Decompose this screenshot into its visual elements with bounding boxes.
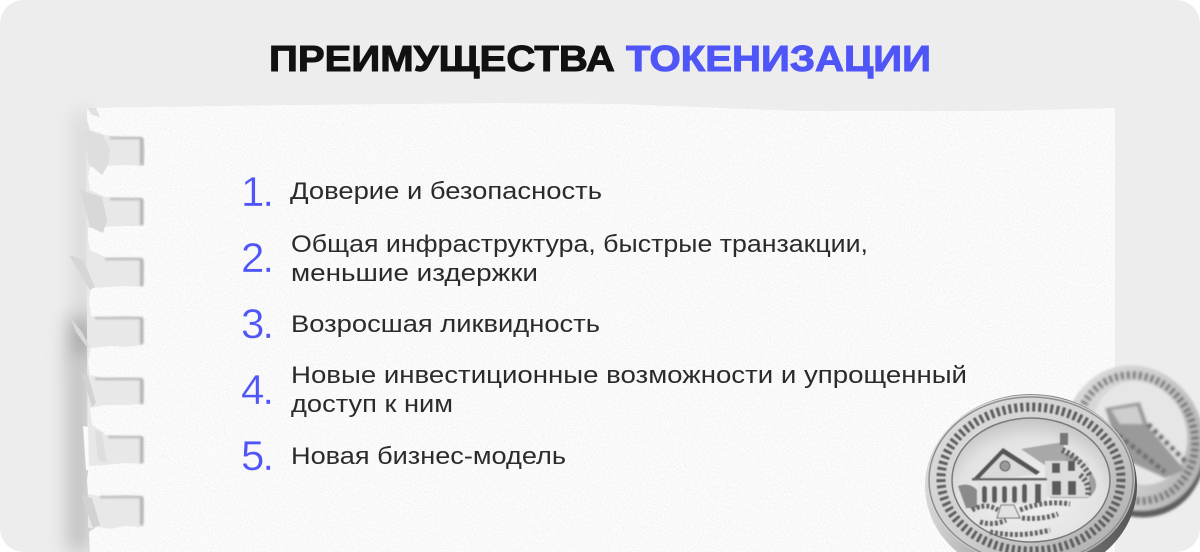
- torn paper flaps: [69, 108, 110, 528]
- item 5: [242, 441, 565, 470]
- item 1: 1.: [241, 168, 272, 215]
- item 4: доступ к ним: [291, 391, 453, 418]
- item 4: [241, 362, 967, 418]
- item 5: 5.: [241, 432, 272, 479]
- coin field: [952, 418, 1110, 542]
- item 5: Новая бизнес-модель: [291, 443, 566, 470]
- notch shadows: [95, 137, 144, 525]
- item 3: 3.: [241, 300, 272, 347]
- icon: rear silver coin: [1072, 364, 1200, 520]
- list of advantages: [241, 168, 967, 479]
- item 2: [241, 231, 868, 287]
- house engraving: [958, 433, 1096, 535]
- item 1: Доверие и безопасность: [290, 178, 602, 205]
- paper shadow: [56, 114, 95, 552]
- item 2: Общая инфраструктура, быстрые транзакции,: [291, 231, 868, 258]
- title: ПРЕИМУЩЕСТВА ТОКЕНИЗАЦИИ: [269, 38, 931, 79]
- item 4: 4.: [241, 366, 272, 413]
- rim lettering pattern: [941, 407, 1121, 551]
- icon: front silver coin: [925, 394, 1137, 552]
- torn paper sheet: [80, 100, 1120, 552]
- item 2: 2.: [241, 234, 272, 281]
- item 2: меньшие издержки: [291, 260, 538, 287]
- item 3: Возросшая ликвидность: [291, 311, 600, 338]
- item 3: [242, 309, 599, 338]
- item 4: Новые инвестиционные возможности и упрощенный: [291, 362, 967, 389]
